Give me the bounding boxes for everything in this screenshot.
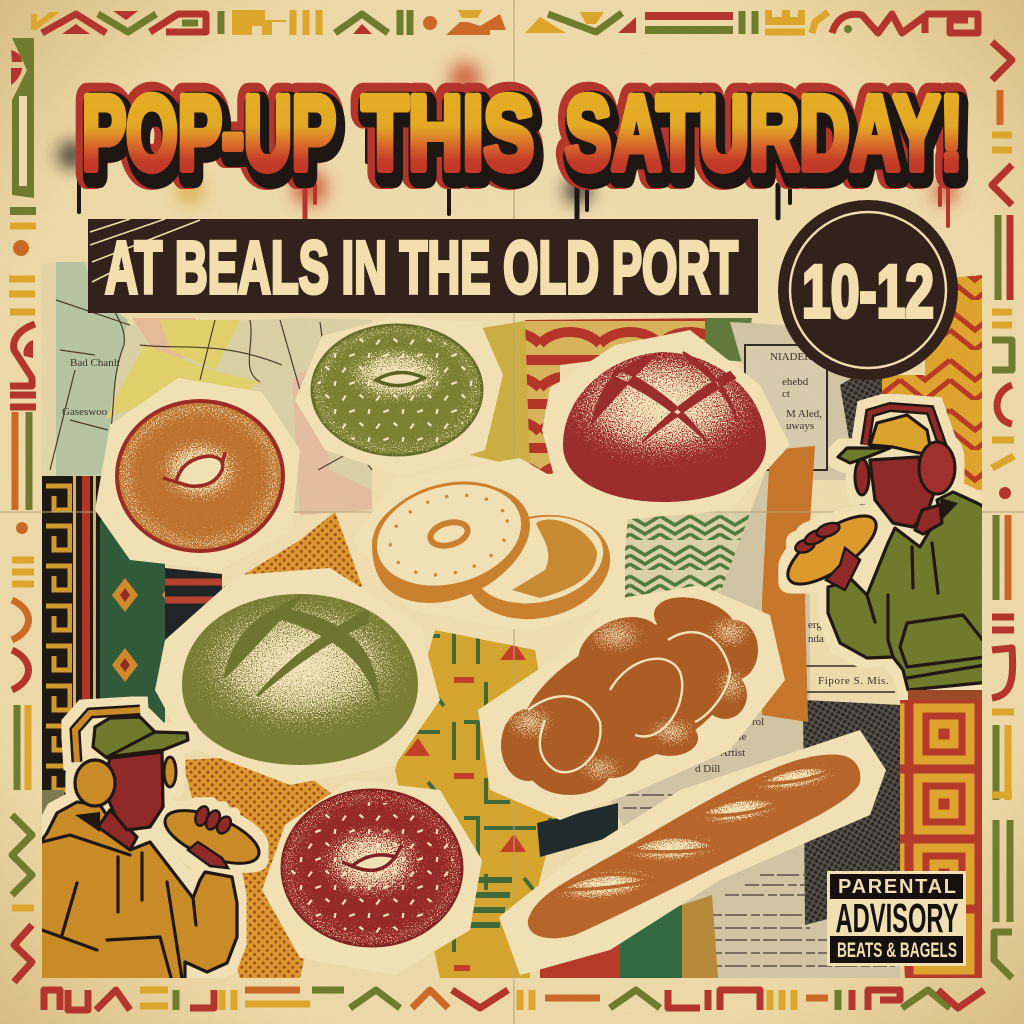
word: POP-UP: POP-UP — [86, 82, 340, 199]
word: THIS: THIS — [362, 78, 534, 195]
word: THIS: THIS — [362, 75, 534, 192]
left border — [9, 38, 36, 982]
hoodie — [828, 492, 990, 690]
newspaper — [610, 322, 900, 978]
word: POP-UP: POP-UP — [82, 78, 336, 195]
top border — [31, 10, 978, 35]
parental advisory label: BEATS & BAGELS — [837, 939, 957, 962]
bottom centre scraps — [470, 890, 530, 978]
sticker: olive sesame bagel — [295, 318, 503, 476]
map scrap: Gaseswoo — [62, 406, 108, 418]
spray splatter — [58, 62, 957, 206]
newspaper: arie — [730, 731, 747, 743]
hoodie pocket — [900, 615, 985, 667]
sticker: baguette — [499, 730, 886, 975]
cap brim — [838, 448, 890, 463]
newspaper: NIADER F — [770, 351, 820, 363]
parental advisory label — [827, 871, 966, 966]
word: THIS: THIS — [366, 82, 538, 199]
sticker: braided challah — [478, 585, 785, 820]
neck shadow — [940, 498, 958, 520]
near ear cup — [919, 442, 955, 494]
time badge — [778, 200, 958, 380]
sticker: red bagel — [262, 780, 482, 975]
sticker: caramel bagel — [95, 378, 300, 570]
torn fabric strips left — [42, 476, 222, 850]
newspaper: M Aled, — [786, 408, 822, 420]
trousers — [908, 690, 982, 702]
near ear cup — [75, 760, 115, 806]
baguette — [778, 504, 886, 596]
word: POP-UP — [82, 75, 340, 199]
newspaper: nda — [808, 633, 824, 645]
newspaper: ct — [782, 388, 790, 400]
dark torn photo — [803, 700, 900, 925]
face — [103, 752, 163, 830]
sticker: red scored boule — [542, 330, 790, 520]
map scrap — [42, 262, 372, 515]
cap — [870, 415, 932, 456]
newspaper: uways — [786, 420, 814, 432]
sticker: olive scored boule — [155, 568, 440, 785]
neck shadow — [75, 812, 100, 832]
location banner — [88, 219, 758, 313]
right side tribal patches — [882, 275, 982, 490]
figure: right listener in green hoodie — [778, 407, 990, 702]
face — [870, 457, 935, 527]
headband inner — [865, 407, 943, 447]
map scrap: Bad Chanlt — [70, 357, 120, 369]
hoodie — [30, 802, 237, 990]
drips — [79, 130, 948, 226]
fingers — [794, 520, 860, 590]
fingers — [188, 805, 234, 868]
newspaper: rol — [752, 716, 764, 728]
headband inner — [75, 710, 140, 762]
neck — [915, 505, 942, 534]
orange torn strip — [762, 446, 815, 722]
title: graffiti headline — [58, 62, 967, 226]
newspaper: erg — [808, 619, 822, 631]
collage background — [42, 262, 982, 978]
headband — [75, 710, 140, 762]
bottom border — [44, 990, 984, 1010]
green fabric — [625, 511, 751, 598]
cap — [93, 717, 163, 758]
word: POP-UP: POP-UP — [82, 75, 336, 192]
figure: left listener in orange hoodie — [30, 710, 266, 990]
hoodie details — [42, 835, 196, 985]
newspaper: Fipore S. Mis. — [818, 675, 889, 687]
sticker: sliced bagel with spread — [352, 458, 625, 632]
headband — [865, 407, 943, 447]
newspaper: ehebd — [782, 376, 809, 388]
far ear cup — [855, 459, 869, 495]
baguette — [158, 800, 266, 874]
right border — [992, 42, 1014, 978]
parental advisory label: PARENTAL — [838, 876, 956, 898]
cap brim — [107, 732, 188, 757]
far ear cup — [164, 757, 176, 787]
yellow tribal centre — [395, 630, 560, 978]
newspaper: d Dill — [695, 763, 720, 775]
time badge: 10-12 — [802, 250, 934, 333]
neck — [98, 810, 137, 850]
orange halftone scraps — [222, 512, 362, 589]
hoodie details — [867, 543, 985, 678]
newspaper: for Artist — [705, 747, 745, 759]
